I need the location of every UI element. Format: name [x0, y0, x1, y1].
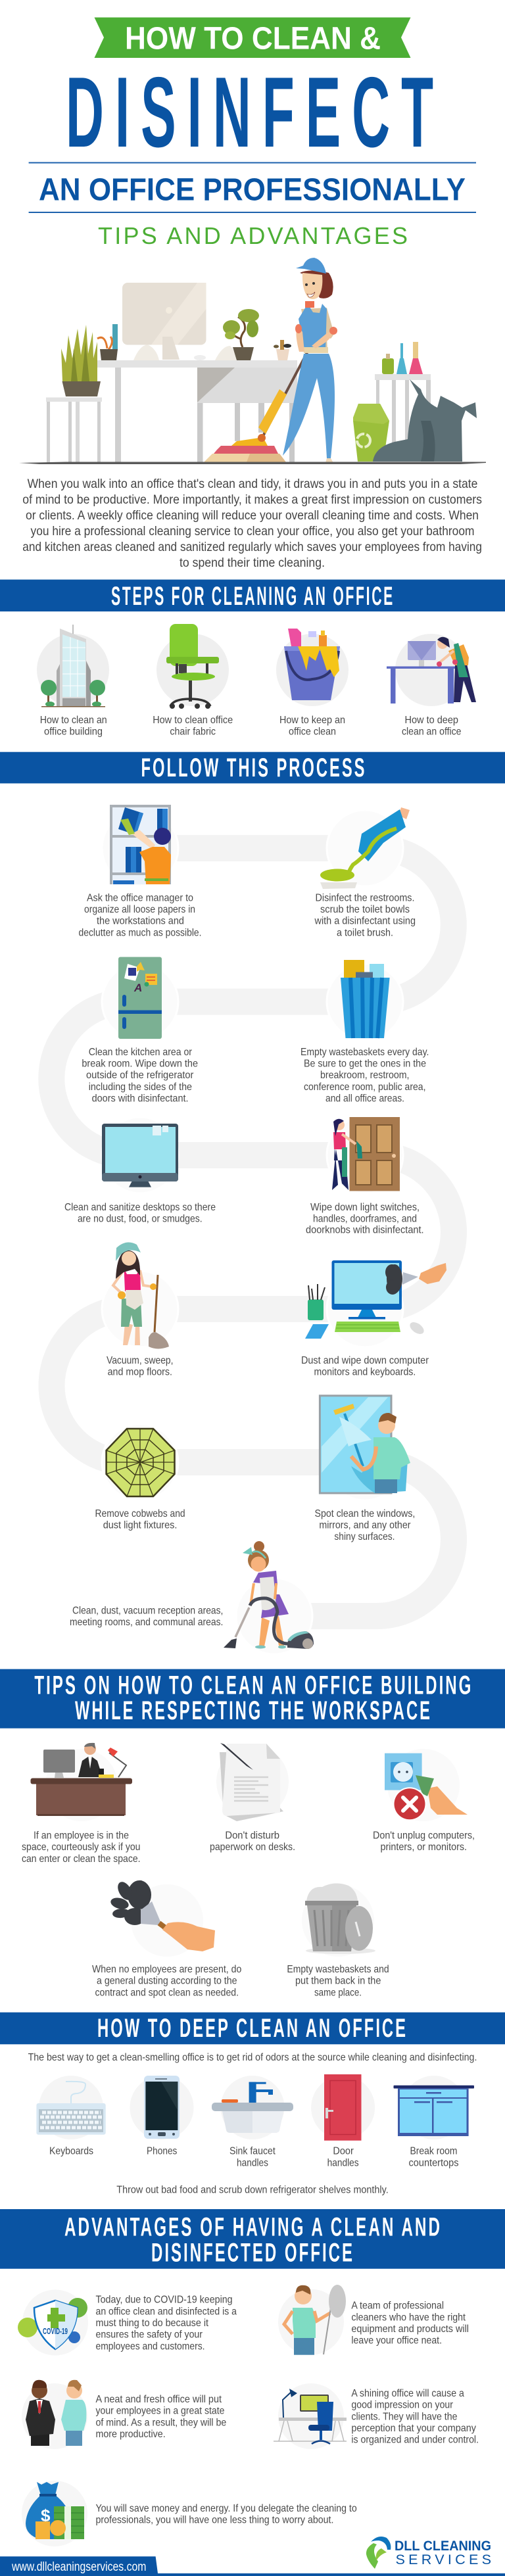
- step 11 text: Clean, dust, vacuum reception areas,: [72, 1606, 223, 1616]
- monitor on desk: [122, 283, 237, 360]
- hero illustration: office cleaner: [19, 258, 486, 464]
- advantage 3 text: more productive.: [96, 2429, 166, 2440]
- icon: person cleaning desk: [387, 634, 476, 706]
- tip 3 text: printers, or monitors.: [380, 1842, 467, 1853]
- step 9 text: [95, 1508, 185, 1531]
- advantage 3 text: of mind. As a result, they will be: [96, 2417, 226, 2428]
- icon: money bag: $: [41, 2506, 51, 2525]
- advantage 3 text: your employees in a great state: [96, 2406, 224, 2417]
- label: Phones: [147, 2146, 177, 2157]
- panel: deep clean: [28, 2052, 477, 2195]
- step 3 text: [82, 1047, 198, 1104]
- step 3: clean kitchen: A: [133, 982, 142, 994]
- logo: SERVICES: [396, 2551, 491, 2567]
- step 3 text: Clean the kitchen area or: [89, 1047, 193, 1058]
- advantage 5 text: professionals, you will have one less thing to worry about.: [96, 2515, 333, 2526]
- tip 4 text: When no employees are present, do: [92, 1964, 241, 1975]
- icon: man with mop: [278, 2285, 346, 2355]
- caption: How to deep: [405, 715, 458, 726]
- step 6 text: handles, doorframes, and: [313, 1214, 417, 1224]
- advantage 1 text: [96, 2295, 237, 2352]
- desk items: [97, 309, 291, 360]
- step 4 text: breakroom, restroom,: [320, 1070, 409, 1081]
- logo: DLL CLEANING: [395, 2537, 491, 2554]
- section heading: tips on how to clean an office building: [0, 1669, 505, 1729]
- icon: paperwork and pen: [216, 1743, 289, 1821]
- caption: [40, 715, 107, 738]
- step 5 text: are no dust, food, or smudges.: [78, 1214, 203, 1224]
- step 10 text: mirrors, and any other: [319, 1520, 411, 1531]
- icon: desk with chair: [274, 2383, 347, 2449]
- subtitle: TIPS AND ADVANTAGES: [98, 222, 408, 249]
- logo: [364, 2536, 491, 2569]
- step 4 text: [301, 1047, 429, 1104]
- caption: How to clean office: [153, 715, 233, 726]
- advantage 3 text: [96, 2394, 226, 2440]
- label: [327, 2146, 359, 2168]
- section heading: advantages: [0, 2209, 505, 2269]
- advantage 4 text: [351, 2388, 479, 2446]
- step 8: dust monitors: [305, 1260, 446, 1347]
- cleaner woman: [283, 258, 337, 463]
- tip 1 text: can enter or clean the space.: [22, 1853, 141, 1865]
- step 9 text: Remove cobwebs and: [95, 1508, 185, 1519]
- step 2 text: a toilet brush.: [337, 927, 393, 938]
- icon: money bag: [22, 2481, 87, 2546]
- caption: office building: [44, 727, 103, 738]
- garbage bags: [373, 379, 477, 462]
- step 2: disinfect restrooms: [320, 807, 410, 889]
- label: handles: [327, 2157, 359, 2168]
- step 5 text: Clean and sanitize desktops so there: [64, 1202, 216, 1213]
- step 9: remove cobwebs: [102, 1424, 178, 1500]
- step 11: clean reception areas: [224, 1541, 314, 1654]
- icon: office building: [37, 625, 109, 707]
- step 10 text: [314, 1508, 415, 1542]
- advantage 1 text: ensures the safety of your: [96, 2329, 203, 2341]
- process path: [51, 848, 454, 1616]
- advantage 2 text: [351, 2301, 469, 2347]
- advantage 4 text: clients. They will have the: [351, 2411, 458, 2422]
- step 7 text: and mop floors.: [108, 1366, 172, 1377]
- advantage 1 text: employees and customers.: [96, 2341, 205, 2352]
- caption: clean an office: [402, 727, 462, 738]
- step 2 text: [314, 893, 416, 938]
- cleaning supplies on table: [375, 342, 431, 446]
- step 4 text: Be sure to get the ones in the: [304, 1059, 426, 1070]
- step 1 text: organize all loose papers in: [84, 904, 195, 915]
- intro paragraph: to spend their time cleaning.: [180, 556, 325, 570]
- footer: [0, 2536, 505, 2576]
- step 3 text: including the sides of the: [89, 1082, 192, 1093]
- label: Door: [333, 2146, 354, 2157]
- tip 5 text: Empty wastebaskets and: [287, 1964, 389, 1975]
- label: Break room: [410, 2146, 458, 2157]
- step 7: vacuum and mop: [102, 1242, 178, 1349]
- step 1 text: the workstations and: [97, 916, 184, 927]
- icon: trash can: [302, 1883, 375, 1957]
- step 2 text: with a disinfectant using: [314, 916, 416, 927]
- advantage 4 text: perception that your company: [351, 2423, 476, 2434]
- tip 2 text: Don't disturb: [225, 1830, 279, 1841]
- panel: advantages: [18, 2285, 479, 2546]
- caption: office clean: [289, 727, 336, 738]
- caption: [279, 715, 345, 738]
- tip 4 text: a general dusting according to the: [97, 1976, 237, 1987]
- icon: phone: [130, 2076, 193, 2139]
- icon: do not unplug: [385, 1749, 468, 1821]
- step 8 text: Dust and wipe down computer: [301, 1355, 429, 1366]
- step 3: clean kitchen: [102, 957, 178, 1040]
- floor line: [19, 462, 486, 464]
- advantage 1 text: must thing to do because it: [96, 2318, 208, 2329]
- deep clean closing text: Throw out bad food and scrub down refrigerator shelves monthly.: [116, 2184, 389, 2195]
- icon: sink faucet: [212, 2076, 293, 2139]
- icon: covid shield: COVID-19: [43, 2326, 68, 2336]
- caption: [153, 715, 233, 738]
- advantage 5 text: You will save money and energy. If you delegate the cleaning to: [96, 2503, 357, 2514]
- step 8 text: [301, 1355, 429, 1377]
- tip 3 text: Don't unplug computers,: [373, 1830, 475, 1841]
- icon: bucket with supplies: [276, 629, 349, 706]
- step 1 text: declutter as much as possible.: [79, 927, 201, 938]
- caption: [402, 715, 462, 738]
- step 4 text: and all office areas.: [325, 1093, 404, 1104]
- step 6 text: [306, 1202, 424, 1236]
- advantage 1 text: Today, due to COVID-19 keeping: [96, 2295, 233, 2306]
- recycling bin: [353, 404, 389, 462]
- step 1: organize papers: [102, 805, 178, 886]
- advantage 4 text: A shining office will cause a: [351, 2388, 464, 2399]
- caption: How to keep an: [279, 715, 345, 726]
- step 9 text: dust light fixtures.: [103, 1520, 177, 1531]
- tip 4 text: contract and spot clean as needed.: [95, 1987, 239, 1998]
- step 4: empty wastebaskets: [327, 960, 403, 1040]
- icon: countertop cabinet: [393, 2076, 474, 2139]
- tip 4 text: [92, 1964, 241, 1998]
- step 3 text: doors with disinfectant.: [92, 1093, 188, 1104]
- step 1 text: Ask the office manager to: [87, 893, 193, 903]
- label: countertops: [409, 2157, 459, 2168]
- step 5: sanitize desktops: [102, 1117, 178, 1193]
- step 4 text: conference room, public area,: [304, 1082, 426, 1093]
- advantage 2 text: A team of professional: [351, 2301, 444, 2312]
- advantage 1 text: an office clean and disinfected is a: [96, 2306, 237, 2317]
- step 7 text: [107, 1355, 174, 1377]
- section heading: advantages: DISINFECTED OFFICE: [151, 2238, 354, 2267]
- title line: an office professionally: AN OFFICE PROFESSIONALLY: [39, 173, 466, 208]
- icon: covid shield: [18, 2289, 88, 2355]
- step 8 text: monitors and keyboards.: [314, 1366, 416, 1377]
- tip 2 text: [210, 1830, 295, 1853]
- footer bar with website: www.dllcleaningservices.com: [11, 2560, 146, 2574]
- footer bar with website: [0, 2556, 505, 2576]
- advantage 2 text: cleaners who have the right: [351, 2312, 466, 2323]
- step 3 text: break room. Wipe down the: [82, 1059, 198, 1070]
- step 6 text: Wipe down light switches,: [310, 1202, 420, 1213]
- tip 3 text: [373, 1830, 475, 1853]
- intro paragraph: [22, 477, 482, 570]
- label: handles: [237, 2157, 268, 2168]
- tip 5 text: put them back in the: [295, 1976, 381, 1987]
- title ribbon: HOW TO CLEAN &: [125, 22, 381, 57]
- step 11 text: meeting rooms, and communal areas.: [70, 1617, 223, 1628]
- plant on stool: [46, 325, 102, 463]
- advantage 2 text: equipment and products will: [351, 2324, 469, 2335]
- caption: How to clean an: [40, 715, 107, 726]
- title: [29, 17, 476, 249]
- tip 1 text: [22, 1830, 141, 1865]
- panel: process steps: [64, 805, 446, 1654]
- label: Sink faucet: [229, 2146, 276, 2157]
- panel: tips: [22, 1743, 475, 1998]
- advantage 5 text: [96, 2503, 357, 2526]
- advantage 3 text: A neat and fresh office will put: [96, 2394, 222, 2405]
- icon: door: [311, 2074, 375, 2141]
- panel: steps: [37, 624, 476, 738]
- tip 5 text: same place.: [314, 1987, 362, 1998]
- step 10 text: shiny surfaces.: [334, 1531, 395, 1542]
- label: [409, 2146, 459, 2168]
- step 10: spot clean windows: [320, 1396, 410, 1500]
- step 6 text: doorknobs with disinfectant.: [306, 1225, 424, 1236]
- tip 5 text: [287, 1964, 389, 1998]
- step 1 text: [79, 893, 201, 938]
- icon: employee at desk: [30, 1743, 132, 1821]
- tip 1 text: space, courteously ask if you: [22, 1842, 141, 1853]
- advantage 4 text: is organized and under control.: [351, 2435, 479, 2446]
- icon: feather duster in hand: [109, 1880, 215, 1957]
- tip 2 text: paperwork on desks.: [210, 1842, 295, 1853]
- label: Keyboards: [49, 2146, 93, 2157]
- step 6: wipe door handles: [327, 1117, 403, 1193]
- label: [229, 2146, 276, 2168]
- step 10 text: Spot clean the windows,: [314, 1508, 415, 1519]
- section heading: follow this process: [0, 752, 505, 784]
- step 2 text: scrub the toilet bowls: [320, 904, 410, 915]
- icon: keyboard: [36, 2076, 106, 2139]
- vacuum polisher: [204, 345, 311, 462]
- tip 1 text: If an employee is in the: [34, 1830, 129, 1841]
- step 3 text: outside of the refrigerator: [86, 1070, 194, 1081]
- icon: office chair: [156, 624, 229, 709]
- step 4 text: Empty wastebaskets every day.: [301, 1047, 429, 1058]
- desk: [97, 360, 297, 462]
- icon: two employees: [22, 2380, 87, 2449]
- step 11 text: [70, 1606, 223, 1628]
- advantage 4 text: good impression on your: [351, 2400, 454, 2411]
- advantage 2 text: leave your office neat.: [351, 2335, 442, 2347]
- step 2 text: Disinfect the restrooms.: [316, 893, 414, 903]
- caption: chair fabric: [170, 727, 216, 738]
- step 5 text: [64, 1202, 216, 1224]
- step 7 text: Vacuum, sweep,: [107, 1355, 174, 1366]
